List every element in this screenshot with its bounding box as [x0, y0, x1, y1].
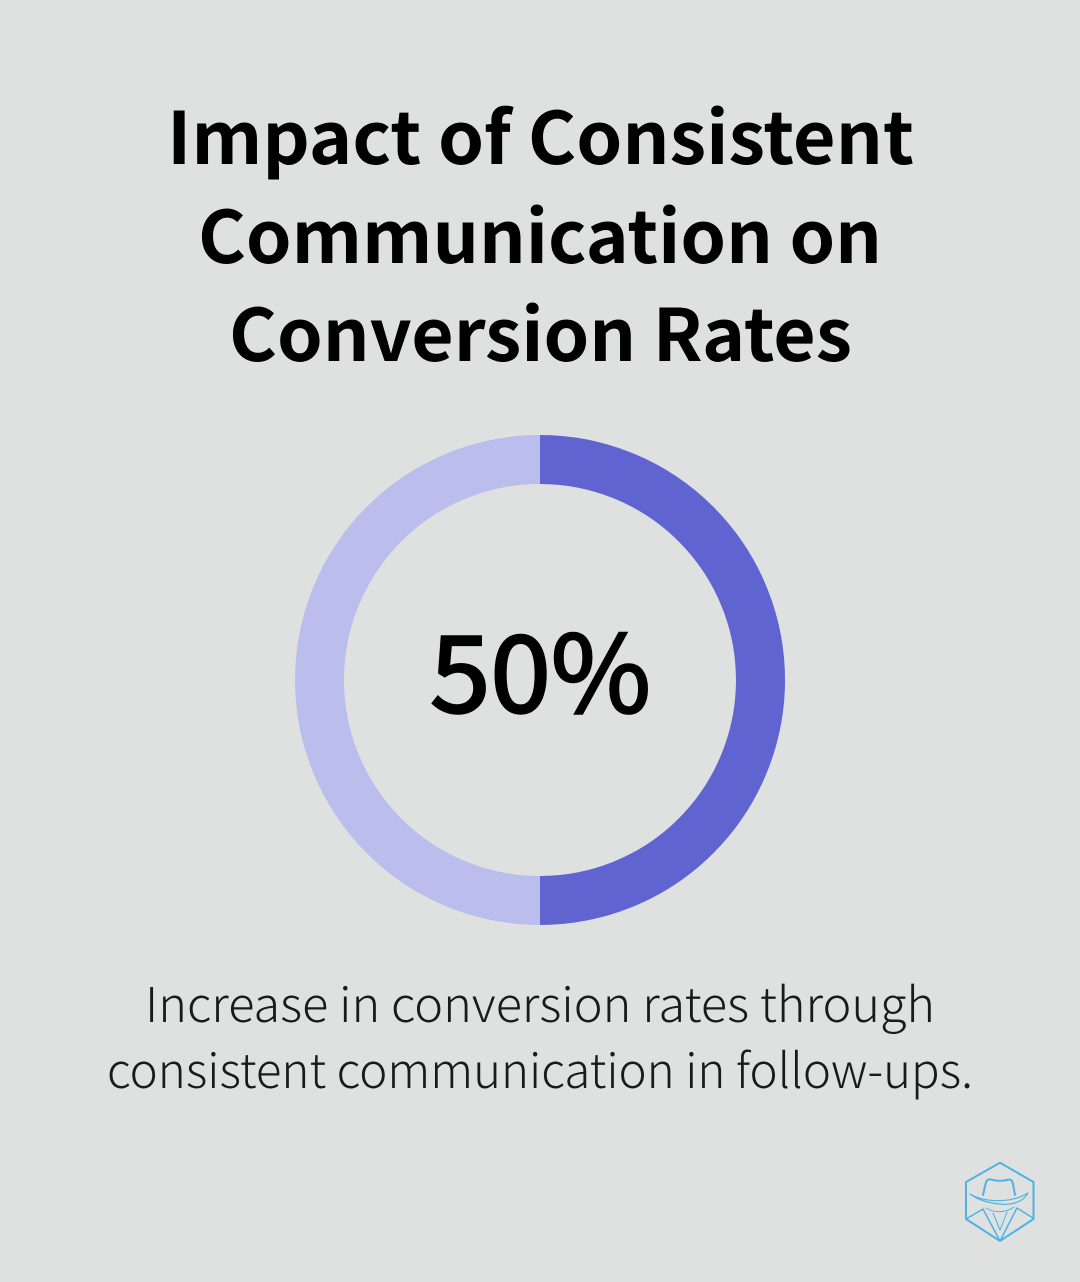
donut chart: 50% — [320, 460, 760, 900]
title — [167, 80, 914, 382]
title: Communication on — [198, 179, 882, 284]
title: Conversion Rates — [229, 277, 852, 382]
description — [107, 966, 973, 1102]
description: consistent communication in follow-ups. — [107, 1032, 973, 1102]
donut value: 50% — [430, 589, 651, 743]
description: Increase in conversion rates through — [145, 966, 935, 1036]
icon: logo, hat and coat in hexagon — [966, 1163, 1034, 1241]
title: Impact of Consistent — [167, 80, 914, 185]
